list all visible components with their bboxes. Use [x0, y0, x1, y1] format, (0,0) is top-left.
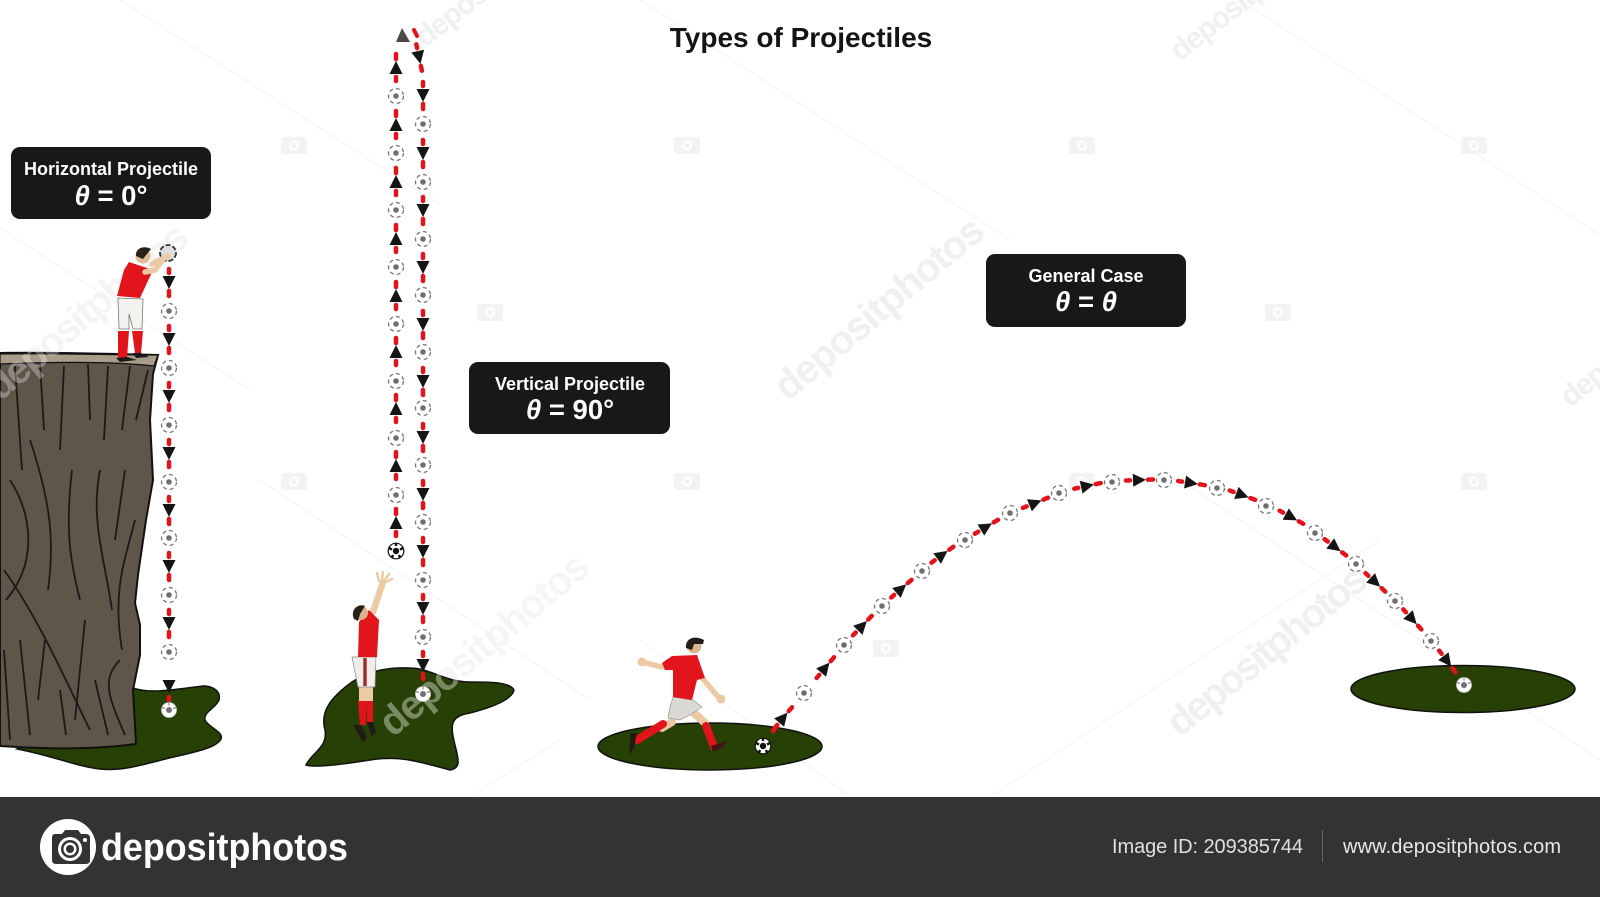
cliff — [0, 214, 197, 748]
player: horizontal throw from cliff — [116, 245, 176, 362]
website url: www.depositphotos.com — [1342, 836, 1561, 858]
watermark layer: depositphotos — [1158, 557, 1376, 745]
trajectory: horizontal projectile — [162, 269, 176, 718]
label: horizontal projectile — [11, 147, 211, 219]
label: vertical projectile — [469, 362, 670, 434]
logo wordmark: depositphotos — [101, 827, 348, 869]
player: vertical throw — [352, 572, 392, 742]
label: general case — [986, 254, 1186, 327]
footer bar — [0, 797, 1600, 897]
label: general case: θ = θ — [1055, 286, 1117, 317]
label: horizontal projectile: θ = 0° — [75, 180, 147, 211]
logo: camera badge — [40, 819, 96, 875]
label: vertical projectile: θ = 90° — [526, 394, 614, 425]
watermark layer: depositphotos — [766, 208, 993, 409]
grass patch: horizontal projectile — [17, 686, 221, 770]
watermark over grass: depositphotos — [371, 544, 598, 745]
label: vertical projectile: Vertical Projectile — [495, 374, 645, 394]
grass ellipse: kick-off — [598, 723, 822, 770]
label: horizontal projectile: Horizontal Projectile — [24, 159, 198, 179]
ball at kick-off — [755, 738, 771, 754]
grass patch: vertical projectile — [306, 668, 514, 770]
trajectory: general case — [770, 472, 1472, 732]
player: kicking the ball — [629, 638, 727, 755]
divider — [1322, 830, 1323, 862]
title: Types of Projectiles — [670, 22, 932, 53]
image id: Image ID: 209385744 — [1112, 836, 1303, 858]
label: general case: General Case — [1028, 266, 1144, 286]
grass ellipse: landing — [1351, 666, 1575, 712]
trajectory: vertical projectile — [388, 28, 430, 702]
watermark layer: depositphotos — [371, 544, 598, 745]
